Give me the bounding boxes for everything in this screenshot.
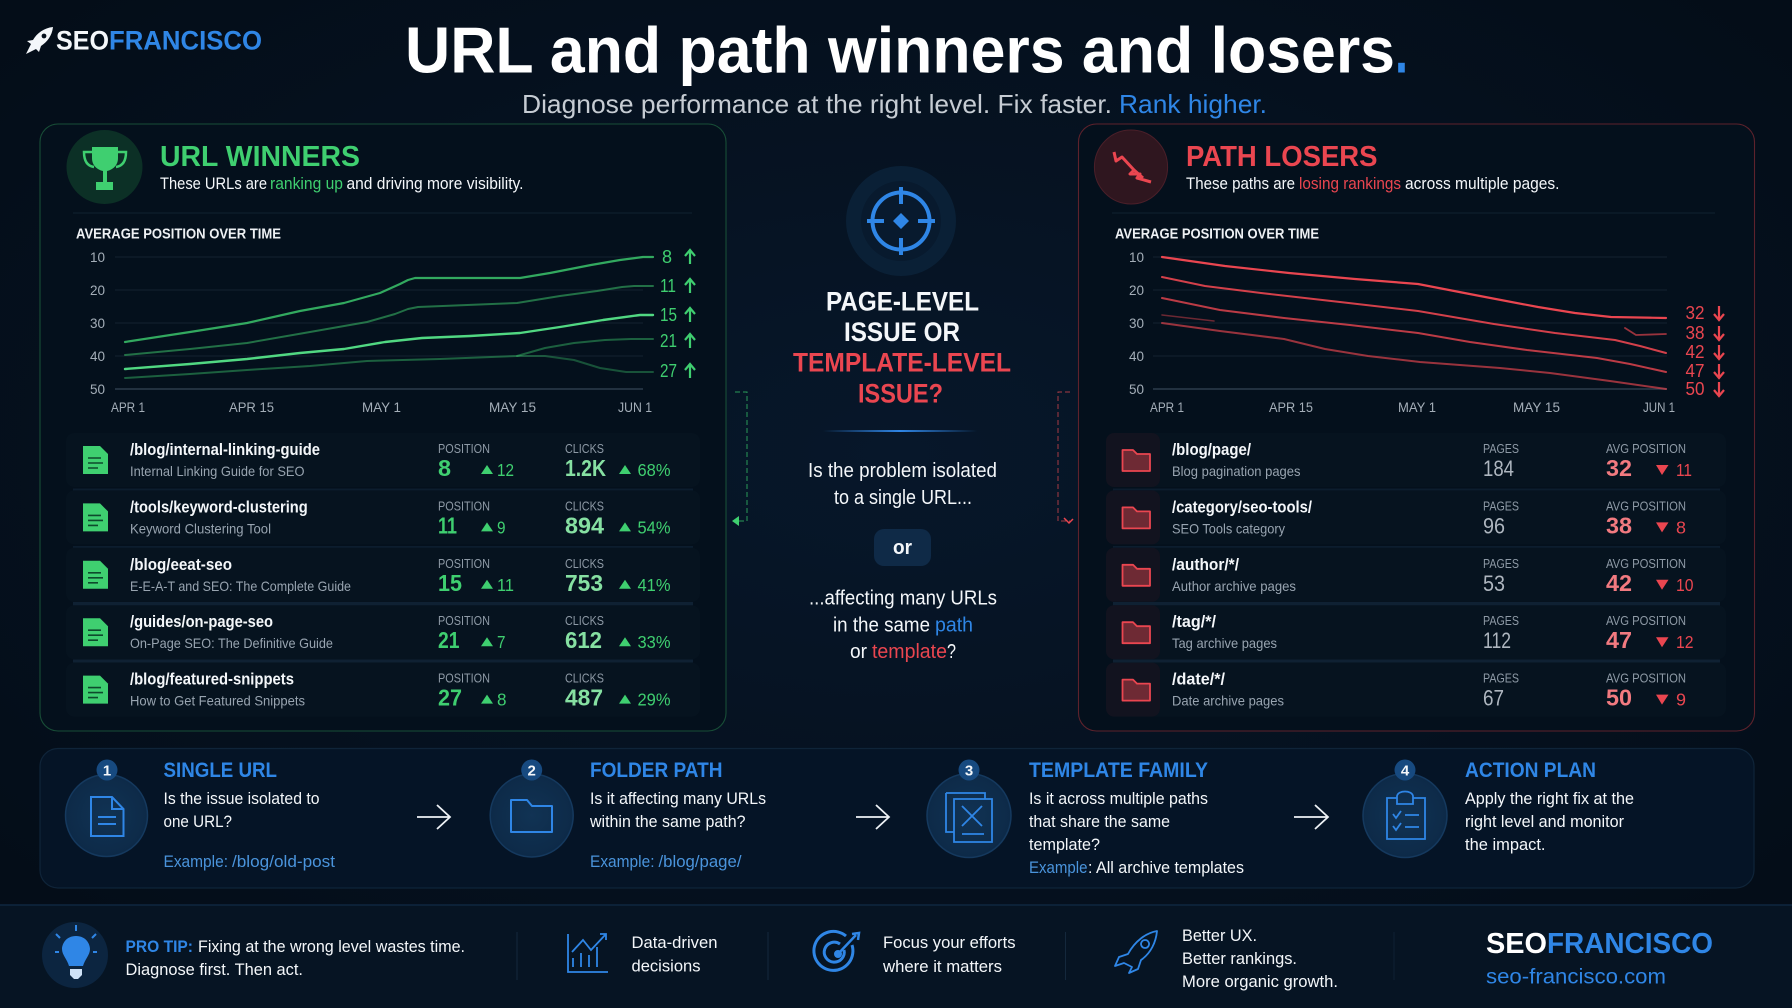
heading: path losers: PATH LOSERS bbox=[1186, 141, 1378, 173]
step text bbox=[589, 789, 766, 831]
x axis labels: APR 15 bbox=[1269, 400, 1313, 415]
url path and title bbox=[130, 498, 308, 536]
heading: page-level or template-level: ISSUE OR bbox=[844, 317, 960, 347]
benefit text: Better rankings. bbox=[1182, 949, 1297, 968]
stat: pages: PAGES bbox=[1483, 442, 1519, 456]
y axis labels: 10 bbox=[1129, 250, 1144, 265]
icon: document in circle bbox=[66, 760, 148, 856]
series: winner lines bbox=[125, 257, 653, 378]
x axis labels: APR 1 bbox=[1150, 400, 1184, 415]
stat: pages: 112 bbox=[1483, 628, 1511, 653]
brand block: seo-francisco.com bbox=[1486, 966, 1666, 988]
stat: clicks: CLICKS bbox=[565, 499, 604, 513]
badge: or: or bbox=[893, 537, 912, 559]
stat: position: 15 bbox=[438, 570, 462, 596]
stat: position: POSITION bbox=[438, 442, 490, 456]
url path and title: How to Get Featured Snippets bbox=[130, 693, 305, 709]
heading: page-level or template-level bbox=[793, 286, 1011, 408]
benefit text bbox=[882, 933, 1016, 976]
row: /blog/internal-linking-guide bbox=[66, 433, 700, 487]
icon: target crosshair bbox=[846, 166, 956, 276]
step example: : All archive templates bbox=[1088, 858, 1244, 877]
question text: many URLs: ? bbox=[947, 641, 956, 663]
stat: average position: 42 bbox=[1606, 570, 1632, 596]
icon: target with arrow bbox=[814, 931, 859, 970]
row: /blog/featured-snippets bbox=[66, 663, 700, 717]
icon: light bulb bbox=[42, 922, 108, 988]
chart heading: AVERAGE POSITION OVER TIME bbox=[1115, 226, 1319, 242]
stat: average position: 38 bbox=[1606, 512, 1632, 538]
row: /category/seo-tools/ bbox=[1106, 490, 1726, 544]
brand block: SEO bbox=[1486, 928, 1547, 960]
series end values bbox=[1686, 303, 1704, 399]
benefit text: where it matters bbox=[882, 957, 1002, 976]
series end values: 21 bbox=[660, 331, 677, 351]
x axis labels: JUN 1 bbox=[618, 400, 652, 415]
stat: average position: 10 bbox=[1676, 575, 1694, 595]
series end values: 47 bbox=[1686, 361, 1704, 381]
question text: many URLs: ...affecting many URLs bbox=[809, 588, 997, 610]
stat: average position: AVG POSITION bbox=[1606, 442, 1686, 456]
series end values: 38 bbox=[1686, 323, 1704, 343]
benefit text bbox=[632, 933, 718, 976]
stat: clicks: 753 bbox=[565, 570, 603, 596]
icon: rocket outline bbox=[1115, 931, 1157, 973]
stat: pages: PAGES bbox=[1483, 499, 1519, 513]
panel description: These URLs are bbox=[160, 175, 267, 193]
benefit: growth bbox=[1115, 926, 1338, 991]
stat: position: 21 bbox=[438, 627, 460, 653]
stat: average position: 32 bbox=[1606, 455, 1632, 481]
stat: clicks: 33% bbox=[638, 632, 670, 652]
stat: average position: AVG POSITION bbox=[1606, 614, 1686, 628]
icons: down arrows bbox=[1714, 306, 1724, 396]
panel: path losers bbox=[1078, 124, 1754, 731]
y axis labels: 30 bbox=[1129, 316, 1144, 331]
connector: winners dashed arrow bbox=[732, 392, 747, 526]
step text: right level and monitor bbox=[1465, 812, 1624, 831]
path and description: /tag/*/ bbox=[1172, 613, 1216, 631]
panel: central question bbox=[793, 166, 1011, 663]
question text: single URL: to a single URL... bbox=[834, 487, 972, 509]
question text: many URLs: in the same bbox=[833, 614, 930, 636]
x axis labels: APR 1 bbox=[111, 400, 145, 415]
row: /blog/page/ bbox=[1106, 433, 1726, 487]
x axis labels bbox=[111, 400, 652, 415]
stat: position bbox=[438, 614, 506, 653]
y axis labels: 10 bbox=[90, 250, 105, 265]
icon: folder bbox=[1106, 663, 1160, 717]
stat: clicks: CLICKS bbox=[565, 614, 604, 628]
subtitle: Diagnose performance at the right level. Fix faster. bbox=[522, 89, 1112, 119]
series end values: 11 bbox=[660, 276, 676, 296]
icon: template layers in circle: 3 bbox=[965, 762, 973, 780]
stat: average position bbox=[1606, 614, 1694, 653]
stat: clicks: 54% bbox=[638, 517, 670, 537]
stat: clicks: 612 bbox=[565, 627, 602, 653]
stat: clicks: 29% bbox=[638, 690, 670, 710]
arrow: step 3 to 4 bbox=[1294, 805, 1328, 829]
panel description: and driving more visibility. bbox=[346, 175, 524, 193]
series: loser lines bbox=[1162, 257, 1666, 389]
logo: SEOFrancisco: FRANCISCO bbox=[109, 26, 262, 56]
step text bbox=[1465, 789, 1634, 854]
question text: many URLs: or bbox=[850, 641, 867, 663]
x axis labels bbox=[1150, 400, 1675, 415]
row: /author/*/ bbox=[1106, 548, 1726, 602]
icon: document bbox=[83, 446, 108, 474]
stat: average position: AVG POSITION bbox=[1606, 672, 1686, 686]
stat: average position bbox=[1606, 442, 1692, 481]
path and description: /blog/page/ bbox=[1172, 441, 1251, 459]
stat: average position: 8 bbox=[1676, 517, 1686, 537]
panel: diagnosis flow bbox=[40, 748, 1754, 888]
subtitle: Rank higher. bbox=[1119, 89, 1267, 119]
benefit text: More organic growth. bbox=[1182, 972, 1338, 991]
icon: trophy bbox=[66, 130, 142, 204]
step text bbox=[164, 789, 320, 831]
path and description: /date/*/ bbox=[1172, 671, 1225, 689]
question text: single URL bbox=[808, 460, 997, 509]
url path and title bbox=[130, 613, 333, 651]
y axis labels: 20 bbox=[1129, 283, 1144, 298]
stat: average position: 12 bbox=[1676, 632, 1694, 652]
footer bar bbox=[0, 905, 1792, 1008]
icon: rocket bbox=[26, 27, 53, 54]
stat: pages: 96 bbox=[1483, 513, 1505, 538]
stat: position bbox=[438, 442, 514, 481]
stat: position bbox=[438, 557, 514, 596]
step text: within the same path? bbox=[589, 812, 746, 831]
heading: page-level or template-level: ISSUE? bbox=[858, 378, 943, 408]
stat: average position: 11 bbox=[1676, 460, 1692, 480]
path and description bbox=[1172, 556, 1296, 594]
icon: folder in circle: 2 bbox=[528, 762, 536, 780]
y axis labels bbox=[1129, 250, 1144, 397]
url path and title bbox=[130, 671, 305, 709]
benefit: data-driven decisions bbox=[568, 933, 718, 976]
stat: average position: AVG POSITION bbox=[1606, 499, 1686, 513]
x axis labels: MAY 1 bbox=[1398, 400, 1436, 415]
title: . bbox=[1395, 14, 1408, 86]
path and description: SEO Tools category bbox=[1172, 520, 1285, 536]
stat: average position: AVG POSITION bbox=[1606, 557, 1686, 571]
panel description: losing rankings bbox=[1299, 175, 1401, 193]
step example: /blog/page/ bbox=[658, 852, 742, 871]
path and description bbox=[1172, 441, 1300, 479]
row: /guides/on-page-seo bbox=[66, 605, 700, 659]
pro tip text: Diagnose first. Then act. bbox=[126, 960, 303, 979]
step text: Is it across multiple paths bbox=[1029, 789, 1208, 808]
stat: average position bbox=[1606, 672, 1686, 711]
stat: position: 7 bbox=[497, 632, 506, 652]
step text: template? bbox=[1029, 835, 1100, 854]
benefit text bbox=[1182, 926, 1338, 991]
line chart: URL winners average position bbox=[76, 226, 695, 415]
stat: clicks bbox=[565, 557, 670, 596]
icon: document bbox=[83, 618, 108, 646]
stat: clicks: 487 bbox=[565, 685, 603, 711]
pro tip text: Fixing at the wrong level wastes time. bbox=[198, 937, 465, 956]
stat: position: POSITION bbox=[438, 499, 490, 513]
stat: pages: 184 bbox=[1483, 456, 1514, 481]
url path and title: E-E-A-T and SEO: The Complete Guide bbox=[130, 578, 351, 594]
row: /blog/eeat-seo bbox=[66, 548, 700, 602]
connector: losers dashed line bbox=[1058, 392, 1073, 523]
question text: many URLs: path bbox=[935, 614, 973, 636]
step 4: action plan bbox=[1363, 759, 1634, 858]
step heading: SINGLE URL bbox=[164, 759, 277, 782]
logo: SEOFrancisco bbox=[26, 26, 262, 56]
question text: many URLs: template bbox=[872, 641, 947, 663]
stat: average position: 50 bbox=[1606, 685, 1632, 711]
brand block bbox=[1486, 928, 1713, 988]
step heading: ACTION PLAN bbox=[1465, 759, 1596, 782]
icon: document bbox=[83, 561, 108, 589]
stat: pages: 67 bbox=[1483, 686, 1504, 711]
series end values: 50 bbox=[1686, 379, 1704, 399]
url path and title: Keyword Clustering Tool bbox=[130, 520, 271, 536]
stat: position: 9 bbox=[497, 517, 506, 537]
y axis labels: 20 bbox=[90, 283, 105, 298]
stat: average position: 47 bbox=[1606, 627, 1632, 653]
step heading: FOLDER PATH bbox=[590, 759, 722, 782]
path and description: Tag archive pages bbox=[1172, 635, 1277, 651]
stat: clicks: CLICKS bbox=[565, 557, 604, 571]
stat: pages bbox=[1483, 499, 1519, 538]
series end values: 32 bbox=[1686, 303, 1704, 323]
row: /tools/keyword-clustering bbox=[66, 490, 700, 544]
question text: many URLs bbox=[809, 588, 997, 663]
x axis labels: MAY 15 bbox=[489, 400, 536, 415]
benefit text: Better UX. bbox=[1182, 926, 1257, 945]
stat: position: POSITION bbox=[438, 672, 490, 686]
icon: clipboard in circle bbox=[1363, 760, 1447, 858]
stat: clicks: 41% bbox=[638, 575, 670, 595]
icons: up arrows bbox=[685, 250, 695, 378]
stat: position: POSITION bbox=[438, 557, 490, 571]
icon: document bbox=[83, 503, 108, 531]
stat: position: POSITION bbox=[438, 614, 490, 628]
stat: clicks: 68% bbox=[638, 460, 670, 480]
step text: Is it affecting many URLs bbox=[590, 789, 766, 808]
y axis labels bbox=[90, 250, 105, 397]
url path and title: On-Page SEO: The Definitive Guide bbox=[130, 635, 333, 651]
icon: document bbox=[83, 676, 108, 704]
x axis labels: JUN 1 bbox=[1643, 400, 1675, 415]
x axis labels: APR 15 bbox=[229, 400, 274, 415]
stat: pages bbox=[1483, 672, 1519, 711]
path and description: /category/seo-tools/ bbox=[1172, 498, 1312, 516]
stat: pages: 53 bbox=[1483, 571, 1505, 596]
step 3: template family bbox=[927, 759, 1244, 877]
stat: average position bbox=[1606, 499, 1686, 538]
stat: clicks: CLICKS bbox=[565, 672, 604, 686]
step text: that share the same bbox=[1029, 812, 1170, 831]
stat: average position bbox=[1606, 557, 1694, 596]
stat: position: 8 bbox=[438, 455, 451, 481]
icon: folder bbox=[1106, 433, 1160, 487]
stat: position bbox=[438, 499, 506, 538]
step heading: TEMPLATE FAMILY bbox=[1029, 759, 1208, 782]
series end values: 15 bbox=[660, 305, 677, 325]
path and description: Author archive pages bbox=[1172, 578, 1296, 594]
icon: template layers in circle bbox=[927, 760, 1011, 858]
benefit text: Focus your efforts bbox=[883, 933, 1016, 952]
url path and title: /guides/on-page-seo bbox=[130, 613, 273, 631]
stat: position: 11 bbox=[438, 512, 457, 538]
path and description: Blog pagination pages bbox=[1172, 463, 1300, 479]
arrow: step 1 to 2 bbox=[417, 805, 450, 829]
question text: single URL: Is the problem isolated bbox=[808, 460, 997, 482]
stat: pages bbox=[1483, 614, 1519, 653]
stat: position bbox=[438, 672, 506, 711]
path and description bbox=[1172, 498, 1312, 536]
brand block: FRANCISCO bbox=[1547, 928, 1713, 960]
icon: declining chart bbox=[1094, 130, 1168, 204]
icon: growth chart bbox=[568, 934, 608, 972]
line chart: path losers average position bbox=[1115, 226, 1724, 415]
stat: clicks: CLICKS bbox=[565, 442, 604, 456]
benefit text: decisions bbox=[632, 956, 700, 976]
step text: Apply the right fix at the bbox=[1465, 789, 1634, 808]
stat: pages: PAGES bbox=[1483, 557, 1519, 571]
step text: one URL? bbox=[164, 812, 232, 831]
stat: position: 11 bbox=[497, 575, 514, 595]
stat: clicks: 1.2K bbox=[565, 455, 606, 481]
x axis labels: MAY 1 bbox=[362, 400, 401, 415]
heading: page-level or template-level: TEMPLATE-LEVEL bbox=[793, 348, 1011, 378]
stat: pages bbox=[1483, 442, 1519, 481]
step example bbox=[1029, 858, 1244, 877]
url path and title bbox=[130, 556, 351, 594]
stat: pages: PAGES bbox=[1483, 614, 1519, 628]
panel description: ranking up bbox=[270, 175, 343, 193]
logo: SEOFrancisco: SEO bbox=[56, 26, 109, 56]
stat: position: 8 bbox=[497, 690, 506, 710]
stat: clicks bbox=[565, 442, 670, 481]
step example: Example: bbox=[590, 852, 654, 871]
stat: clicks bbox=[565, 614, 670, 653]
url path and title: /blog/featured-snippets bbox=[130, 671, 294, 689]
url path and title: /blog/internal-linking-guide bbox=[130, 441, 320, 459]
benefit text: Data-driven bbox=[632, 933, 718, 952]
icon: folder bbox=[1106, 490, 1160, 544]
step example bbox=[590, 852, 742, 871]
url path and title bbox=[130, 441, 320, 479]
step example: Example bbox=[1029, 858, 1088, 877]
panel description: These paths are bbox=[1186, 175, 1295, 193]
pro tip text: PRO TIP: bbox=[126, 937, 193, 956]
series end values bbox=[660, 247, 677, 381]
icon: folder bbox=[1106, 605, 1160, 659]
panel: URL winners bbox=[40, 124, 726, 731]
series end values: 27 bbox=[660, 361, 677, 381]
icon: document in circle: 1 bbox=[103, 762, 111, 780]
path and description bbox=[1172, 671, 1284, 709]
chart heading: AVERAGE POSITION OVER TIME bbox=[76, 226, 281, 242]
stat: position: 27 bbox=[438, 685, 462, 711]
badge: or bbox=[874, 529, 931, 566]
url path and title: /blog/eeat-seo bbox=[130, 556, 232, 574]
panel description bbox=[160, 175, 524, 193]
stat: pages bbox=[1483, 557, 1519, 596]
y axis labels: 30 bbox=[90, 316, 105, 331]
y axis labels: 40 bbox=[90, 349, 105, 364]
stat: clicks: 894 bbox=[565, 512, 604, 538]
panel description bbox=[1186, 175, 1560, 193]
y axis labels: 50 bbox=[90, 382, 105, 397]
row: /date/*/ bbox=[1106, 663, 1726, 717]
stat: clicks bbox=[565, 499, 670, 538]
stat: position: 12 bbox=[497, 460, 514, 480]
series end values: 42 bbox=[1686, 342, 1704, 362]
series end values: 8 bbox=[662, 247, 672, 267]
icon: clipboard in circle: 4 bbox=[1401, 762, 1410, 780]
step 1: single URL bbox=[66, 759, 335, 871]
step example: /blog/old-post bbox=[232, 852, 335, 871]
x axis labels: MAY 15 bbox=[1513, 400, 1560, 415]
y axis labels: 40 bbox=[1129, 349, 1144, 364]
stat: clicks bbox=[565, 672, 670, 711]
row: /tag/*/ bbox=[1106, 605, 1726, 659]
step text: Is the issue isolated to bbox=[164, 789, 320, 808]
arrow: step 2 to 3 bbox=[856, 805, 889, 829]
icon: folder bbox=[1106, 548, 1160, 602]
url path and title: Internal Linking Guide for SEO bbox=[130, 463, 305, 479]
step example: Example: bbox=[164, 852, 228, 871]
url path and title: /tools/keyword-clustering bbox=[130, 498, 308, 516]
stat: average position: 9 bbox=[1676, 690, 1686, 710]
icon: folder in circle bbox=[490, 760, 573, 857]
step example bbox=[164, 852, 335, 871]
path and description bbox=[1172, 613, 1277, 651]
pro tip text bbox=[126, 937, 465, 979]
y axis labels: 50 bbox=[1129, 382, 1144, 397]
heading: URL winners: URL WINNERS bbox=[160, 141, 360, 173]
step text bbox=[1029, 789, 1208, 854]
step 2: folder path bbox=[490, 759, 766, 871]
panel description: across multiple pages. bbox=[1405, 175, 1560, 193]
path and description: Date archive pages bbox=[1172, 693, 1284, 709]
benefit: focus efforts bbox=[814, 931, 1016, 976]
step text: the impact. bbox=[1465, 835, 1546, 854]
path and description: /author/*/ bbox=[1172, 556, 1239, 574]
stat: pages: PAGES bbox=[1483, 672, 1519, 686]
heading: page-level or template-level: PAGE-LEVEL bbox=[826, 286, 979, 316]
title: URL and path winners and losers bbox=[405, 14, 1395, 86]
